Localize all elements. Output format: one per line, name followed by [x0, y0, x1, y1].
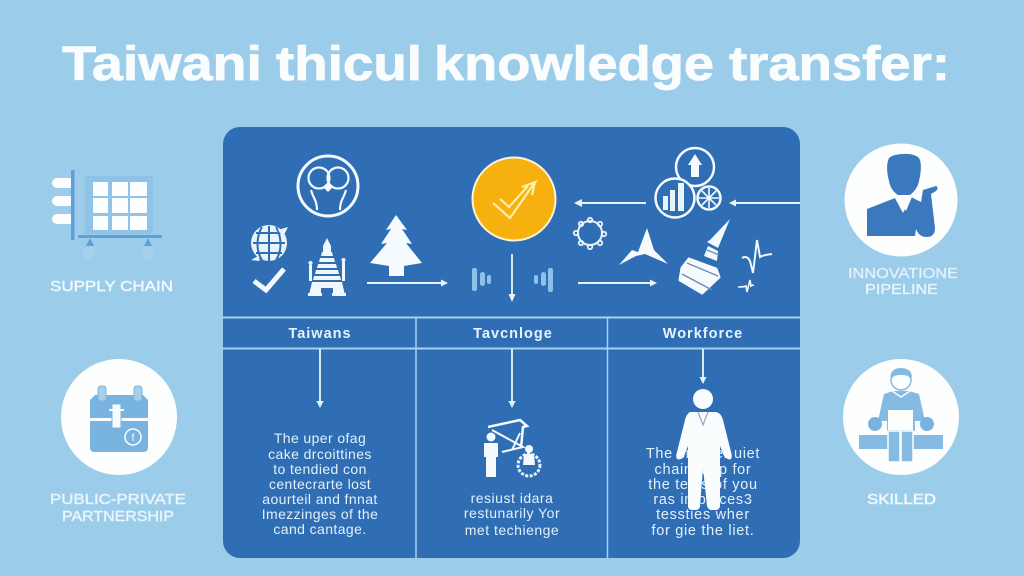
icon: cog ring: [574, 218, 606, 249]
icon: presenter with globe: [484, 420, 540, 477]
label: supply chain: SUPPLY CHAIN: [50, 279, 173, 295]
text block: column 1: [262, 430, 378, 537]
heading: Taiwans: Taiwans: [288, 326, 352, 342]
text block: column 3: chain map for: [655, 462, 751, 478]
label: pipeline: PIPELINE: [865, 282, 938, 298]
label: skilled: SKILLED: [867, 491, 936, 508]
title: knowledge: [434, 38, 714, 91]
arrow: column 3: [700, 349, 706, 384]
text block: column 3: ras in places3: [653, 492, 753, 508]
heading: Tavcnloge: Tavcnloge: [473, 326, 553, 342]
icon: skilled worker: [843, 359, 959, 475]
arrow: from panel edge: [729, 200, 800, 206]
arrow: to rocket: [578, 280, 657, 286]
text block: column 1: to tendied con: [273, 461, 367, 477]
text block: column 2: restunarily Yor: [464, 505, 560, 521]
icon: yellow check badge: [472, 158, 556, 240]
icon: innovation person: [844, 144, 958, 256]
text block: column 1: Imezzinges of the: [262, 506, 378, 522]
label: innovatione: INNOVATIONE: [848, 266, 958, 282]
title: Taiwani: [62, 38, 262, 91]
text block: column 3: The smaller uiet: [646, 446, 760, 462]
icon: bar chart circle: [656, 178, 694, 218]
text block: column 1: centecrarte lost: [269, 476, 371, 492]
icon: standing person: [676, 389, 732, 510]
text block: column 1: cand cantage.: [273, 521, 367, 537]
icon: public-private partnership: [61, 359, 177, 475]
arrow: badge down: [508, 254, 516, 302]
text block: column 2: [464, 490, 560, 538]
icon: delta shape: [619, 228, 668, 265]
title: [62, 38, 950, 91]
label: partnership: PARTNERSHIP: [62, 509, 174, 525]
icon: pulse waves: [738, 240, 772, 292]
text block: column 3: for gie the liet.: [652, 523, 754, 539]
text block: column 3: [646, 446, 760, 539]
title: transfer:: [729, 38, 950, 91]
icon: left bars: [472, 268, 491, 291]
text block: column 1: The uper ofag: [274, 430, 366, 446]
arrow: to badge: [574, 199, 646, 207]
icon: pine tree: [370, 215, 422, 276]
panel: central diagram: [223, 127, 800, 558]
icon: check mark: [254, 269, 284, 290]
label: public-private: PUBLIC-PRIVATE: [50, 492, 186, 508]
icon: upward circle: [676, 148, 714, 186]
icon: supply chain cart: [52, 170, 162, 260]
heading: Workforce: Workforce: [663, 326, 743, 342]
arrow: column 2: [508, 349, 516, 408]
icon: public-private partnership: f: [132, 433, 135, 444]
icon: rocket tool: [680, 219, 730, 293]
icon: right bars: [534, 268, 553, 292]
icon: circular face emblem: [298, 156, 358, 216]
arrow: column 1: [316, 349, 324, 408]
text block: column 1: cake drcoittines: [268, 446, 372, 462]
arrow: tree to centre: [367, 280, 448, 286]
icon: temple: [308, 238, 346, 296]
text block: column 3: tessties wher: [656, 507, 750, 523]
text block: column 3: the tests of you: [648, 477, 758, 493]
text block: column 1: aourteil and fnnat: [262, 491, 378, 507]
table grid: [223, 317, 800, 558]
title: thicul: [276, 38, 422, 91]
icon: globe: [251, 225, 288, 261]
text block: column 2: met techienge: [465, 522, 559, 538]
icon: gear circle: [698, 186, 720, 210]
text block: column 2: resiust idara: [471, 490, 553, 506]
